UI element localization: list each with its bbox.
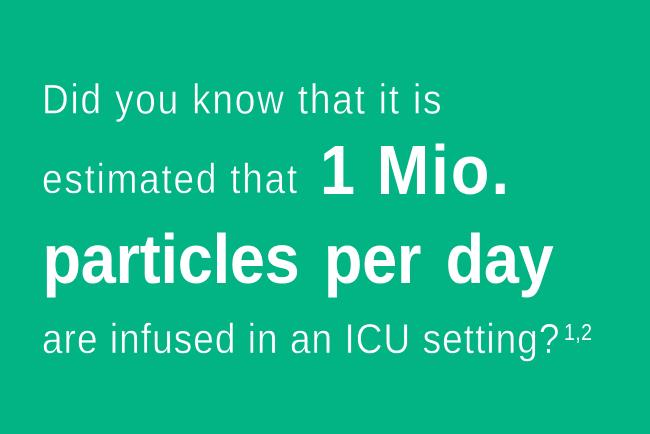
text line 4: are infused in an ICU setting? [42, 316, 559, 363]
highlight: 1 Mio.: 1 Mio. [320, 132, 509, 210]
text line 1: Did you know that it is [42, 76, 442, 123]
text line 2: estimated that [42, 156, 297, 203]
footnote reference: 1,2 [564, 320, 592, 345]
highlight: particles per day: particles per day [42, 221, 554, 299]
